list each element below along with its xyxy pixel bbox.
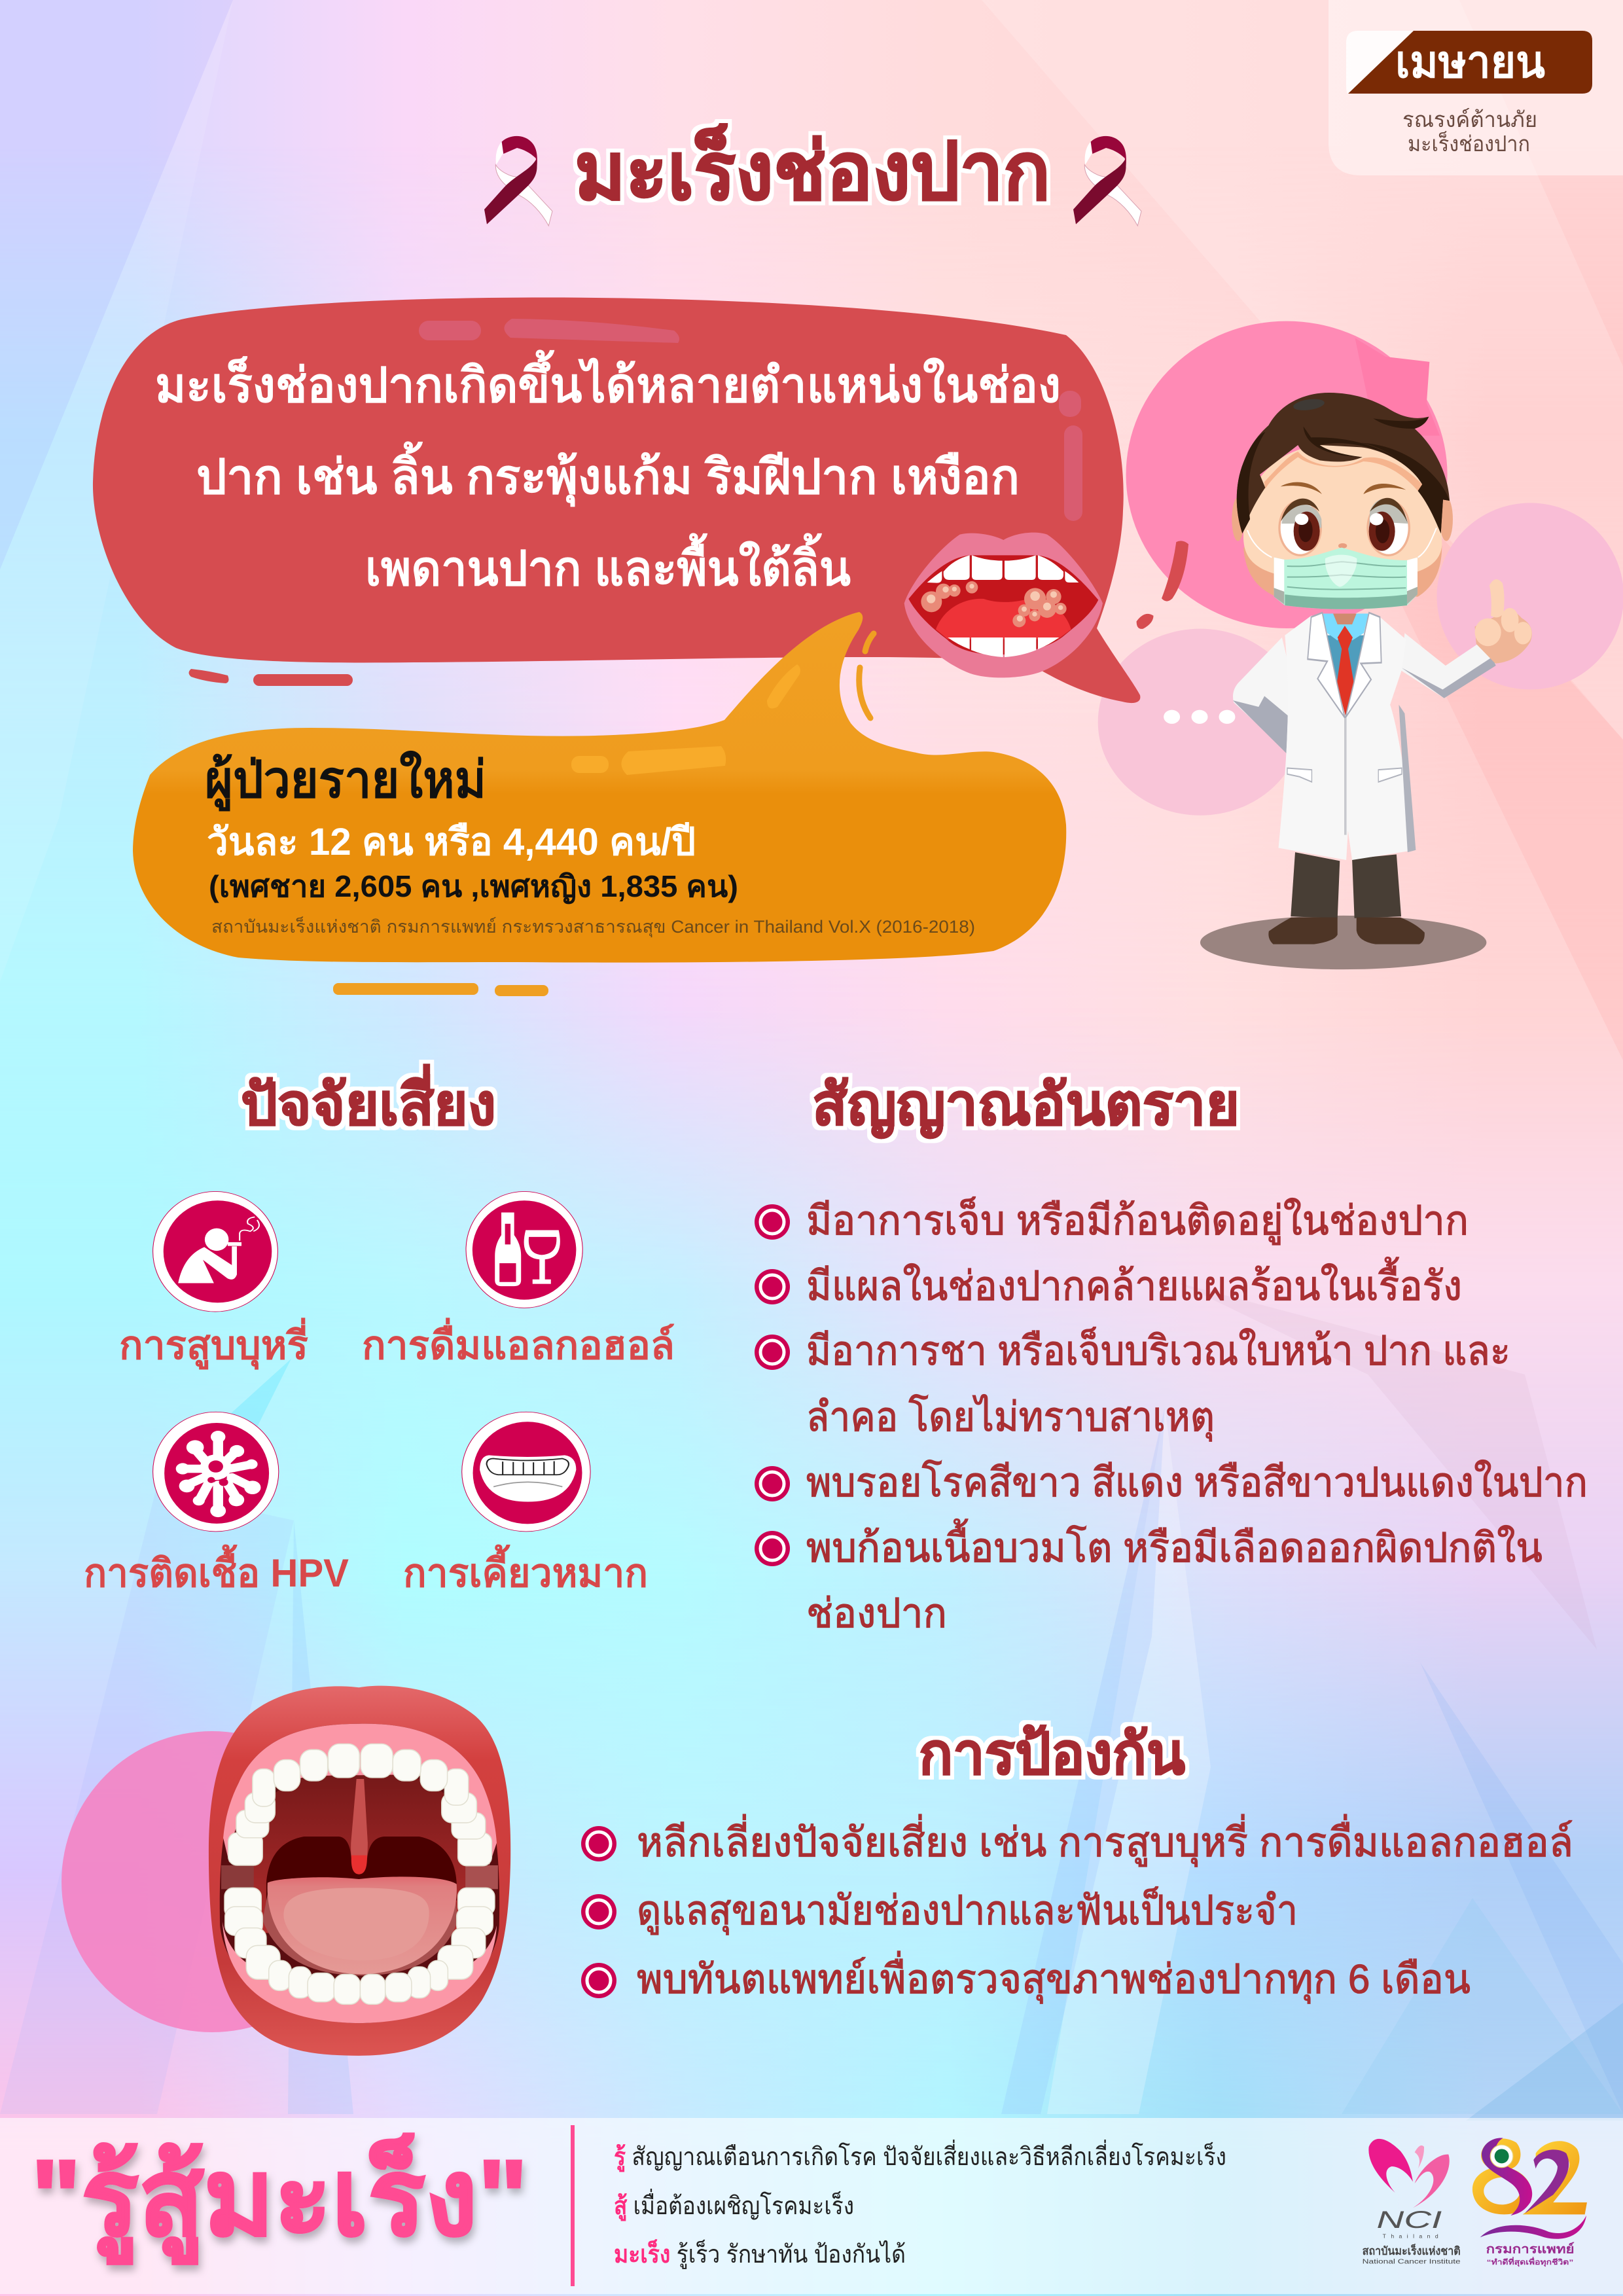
bubble text: เพดานปาก และพื้นใต้ลิ้น [365, 533, 851, 596]
panel: risk factors [84, 1064, 675, 1595]
prevention list text [637, 1814, 1573, 2003]
logo: Department of Medical Services 82: “ทำดีที่สุดเพื่อทุกชีวิต” [1487, 2257, 1573, 2267]
icon: HPV virus [153, 1412, 279, 1532]
heading: prevention: การป้องกัน [919, 1721, 1185, 1786]
slogan explanation [614, 2140, 1226, 2269]
bubble text [155, 350, 1061, 596]
warning list text: ช่องปาก [806, 1591, 947, 1636]
icon: smoking [153, 1191, 277, 1312]
icons group [153, 1191, 590, 1532]
logo: National Cancer Institute: สถาบันมะเร็งแห่งชาติ [1363, 2243, 1461, 2257]
warning list text: พบก้อนเนื้อบวมโต หรือมีเลือดออกผิดปกติใน [806, 1518, 1543, 1571]
warning list text: มีอาการชา หรือเจ็บบริเวณใบหน้า ปาก และ [806, 1327, 1510, 1374]
heading: risk factors: ปัจจัยเสี่ยง [241, 1064, 496, 1137]
heading: warning signs: สัญญาณอันตราย [812, 1072, 1240, 1139]
warning list text: มีแผลในช่องปากคล้ายแผลร้อนในเรื้อรัง [806, 1257, 1462, 1309]
prevention list text: หลีกเลี่ยงปัจจัยเสี่ยง เช่น การสูบบุหรี่ การดื่มแอลกอฮอล์ [637, 1814, 1573, 1867]
label: smoking: การสูบบุหรี่ [119, 1318, 308, 1370]
panel: month tag: เมษายน [1395, 37, 1545, 87]
prevention list text: ดูแลสุขอนามัยช่องปากและฟันเป็นประจำ [637, 1886, 1298, 1935]
illustration: open mouth [62, 1686, 510, 2056]
logo: National Cancer Institute: National Cancer Institute [1363, 2259, 1461, 2266]
logo: National Cancer Institute: Thailand [1383, 2233, 1438, 2239]
new patients text: (เพศชาย 2,605 คน ,เพศหญิง 1,835 คน) [209, 869, 738, 904]
bubble text: มะเร็งช่องปากเกิดขึ้นได้หลายตำแหน่งในช่อง [155, 350, 1061, 412]
illustration: doctor with pink circles [1098, 321, 1623, 969]
doctor body and backdrop [1098, 321, 1623, 969]
panel: footer band [0, 2118, 1623, 2294]
warning list text: มีอาการเจ็บ หรือมีก้อนติดอยู่ในช่องปาก [806, 1196, 1469, 1245]
head [1232, 393, 1453, 609]
logo: National Cancer Institute: NCI [1376, 2206, 1442, 2233]
panel: warning signs [755, 1072, 1588, 1636]
panel: orange speech bubble [133, 612, 1066, 996]
icon: betel chewing [462, 1412, 590, 1532]
mouth anatomy [209, 1686, 510, 2056]
logo: Department of Medical Services 82 [1472, 2138, 1587, 2267]
warning list text: พบรอยโรคสีขาว สีแดง หรือสีขาวปนแดงในปาก [806, 1460, 1588, 1505]
new patients text [205, 750, 975, 938]
warning list text: ลำคอ โดยไม่ทราบสาเหตุ [806, 1394, 1215, 1441]
accent marks [1137, 541, 1188, 629]
slogan explanation: สู้ เมื่อต้องเผชิญโรคมะเร็ง [614, 2189, 854, 2221]
shadow [1200, 916, 1486, 969]
hand with raised finger [1475, 579, 1532, 664]
bullets [581, 1826, 616, 1998]
title text: มะเร็งช่องปาก [575, 124, 1050, 216]
panel: red speech bubble [93, 298, 1140, 703]
bullets [755, 1204, 790, 1566]
warning list text [806, 1196, 1588, 1636]
label: HPV: การติดเชื้อ HPV [84, 1544, 349, 1595]
slogan: "รู้สู้มะเร็ง" [31, 2133, 528, 2265]
prevention list text: พบทันตแพทย์เพื่อตรวจสุขภาพช่องปากทุก 6 เดือน [637, 1951, 1471, 2003]
panel: month tag [1329, 0, 1623, 175]
collar and tie [1308, 613, 1382, 718]
bubble text: ปาก เช่น ลิ้น กระพุ้งแก้ม ริมฝีปาก เหงือก [196, 441, 1020, 507]
slogan explanation: มะเร็ง รู้เร็ว รักษาทัน ป้องกันได้ [614, 2239, 906, 2269]
new patients text: วันละ 12 คน หรือ 4,440 คน/ปี [207, 821, 696, 863]
label: betel: การเคี้ยวหมาก [403, 1544, 648, 1595]
icon: ribbon left [484, 136, 552, 226]
icon: ribbon right [1073, 136, 1141, 226]
surgical mask [1247, 528, 1436, 609]
icon: alcohol [466, 1191, 582, 1308]
label: alcohol: การดื่มแอลกอฮอล์ [362, 1318, 675, 1367]
eyes [1278, 498, 1410, 556]
title [484, 124, 1141, 226]
logo: National Cancer Institute [1363, 2139, 1461, 2266]
pink circles [1098, 321, 1623, 816]
new patients text: ผู้ป่วยรายใหม่ [205, 750, 486, 812]
panel: prevention [581, 1721, 1573, 2003]
speech dots [1164, 710, 1235, 724]
slogan explanation: รู้ สัญญาณเตือนการเกิดโรค ปัจจัยเสี่ยงและวิธีหลีกเลี่ยงโรคมะเร็ง [614, 2140, 1226, 2172]
panel: month tag: มะเร็งช่องปาก [1408, 131, 1530, 156]
new patients text: สถาบันมะเร็งแห่งชาติ กรมการแพทย์ กระทรวงสาธารณสุข Cancer in Thailand Vol.X (2016-2018) [211, 915, 975, 938]
icon: small mouth with sores [904, 533, 1103, 677]
legs and shoes [1268, 852, 1425, 944]
panel: month tag: รณรงค์ต้านภัย [1402, 107, 1537, 132]
logo: Department of Medical Services 82: กรมการแพทย์ [1486, 2242, 1575, 2256]
pink circle [62, 1731, 363, 2032]
white coat [1233, 616, 1496, 860]
